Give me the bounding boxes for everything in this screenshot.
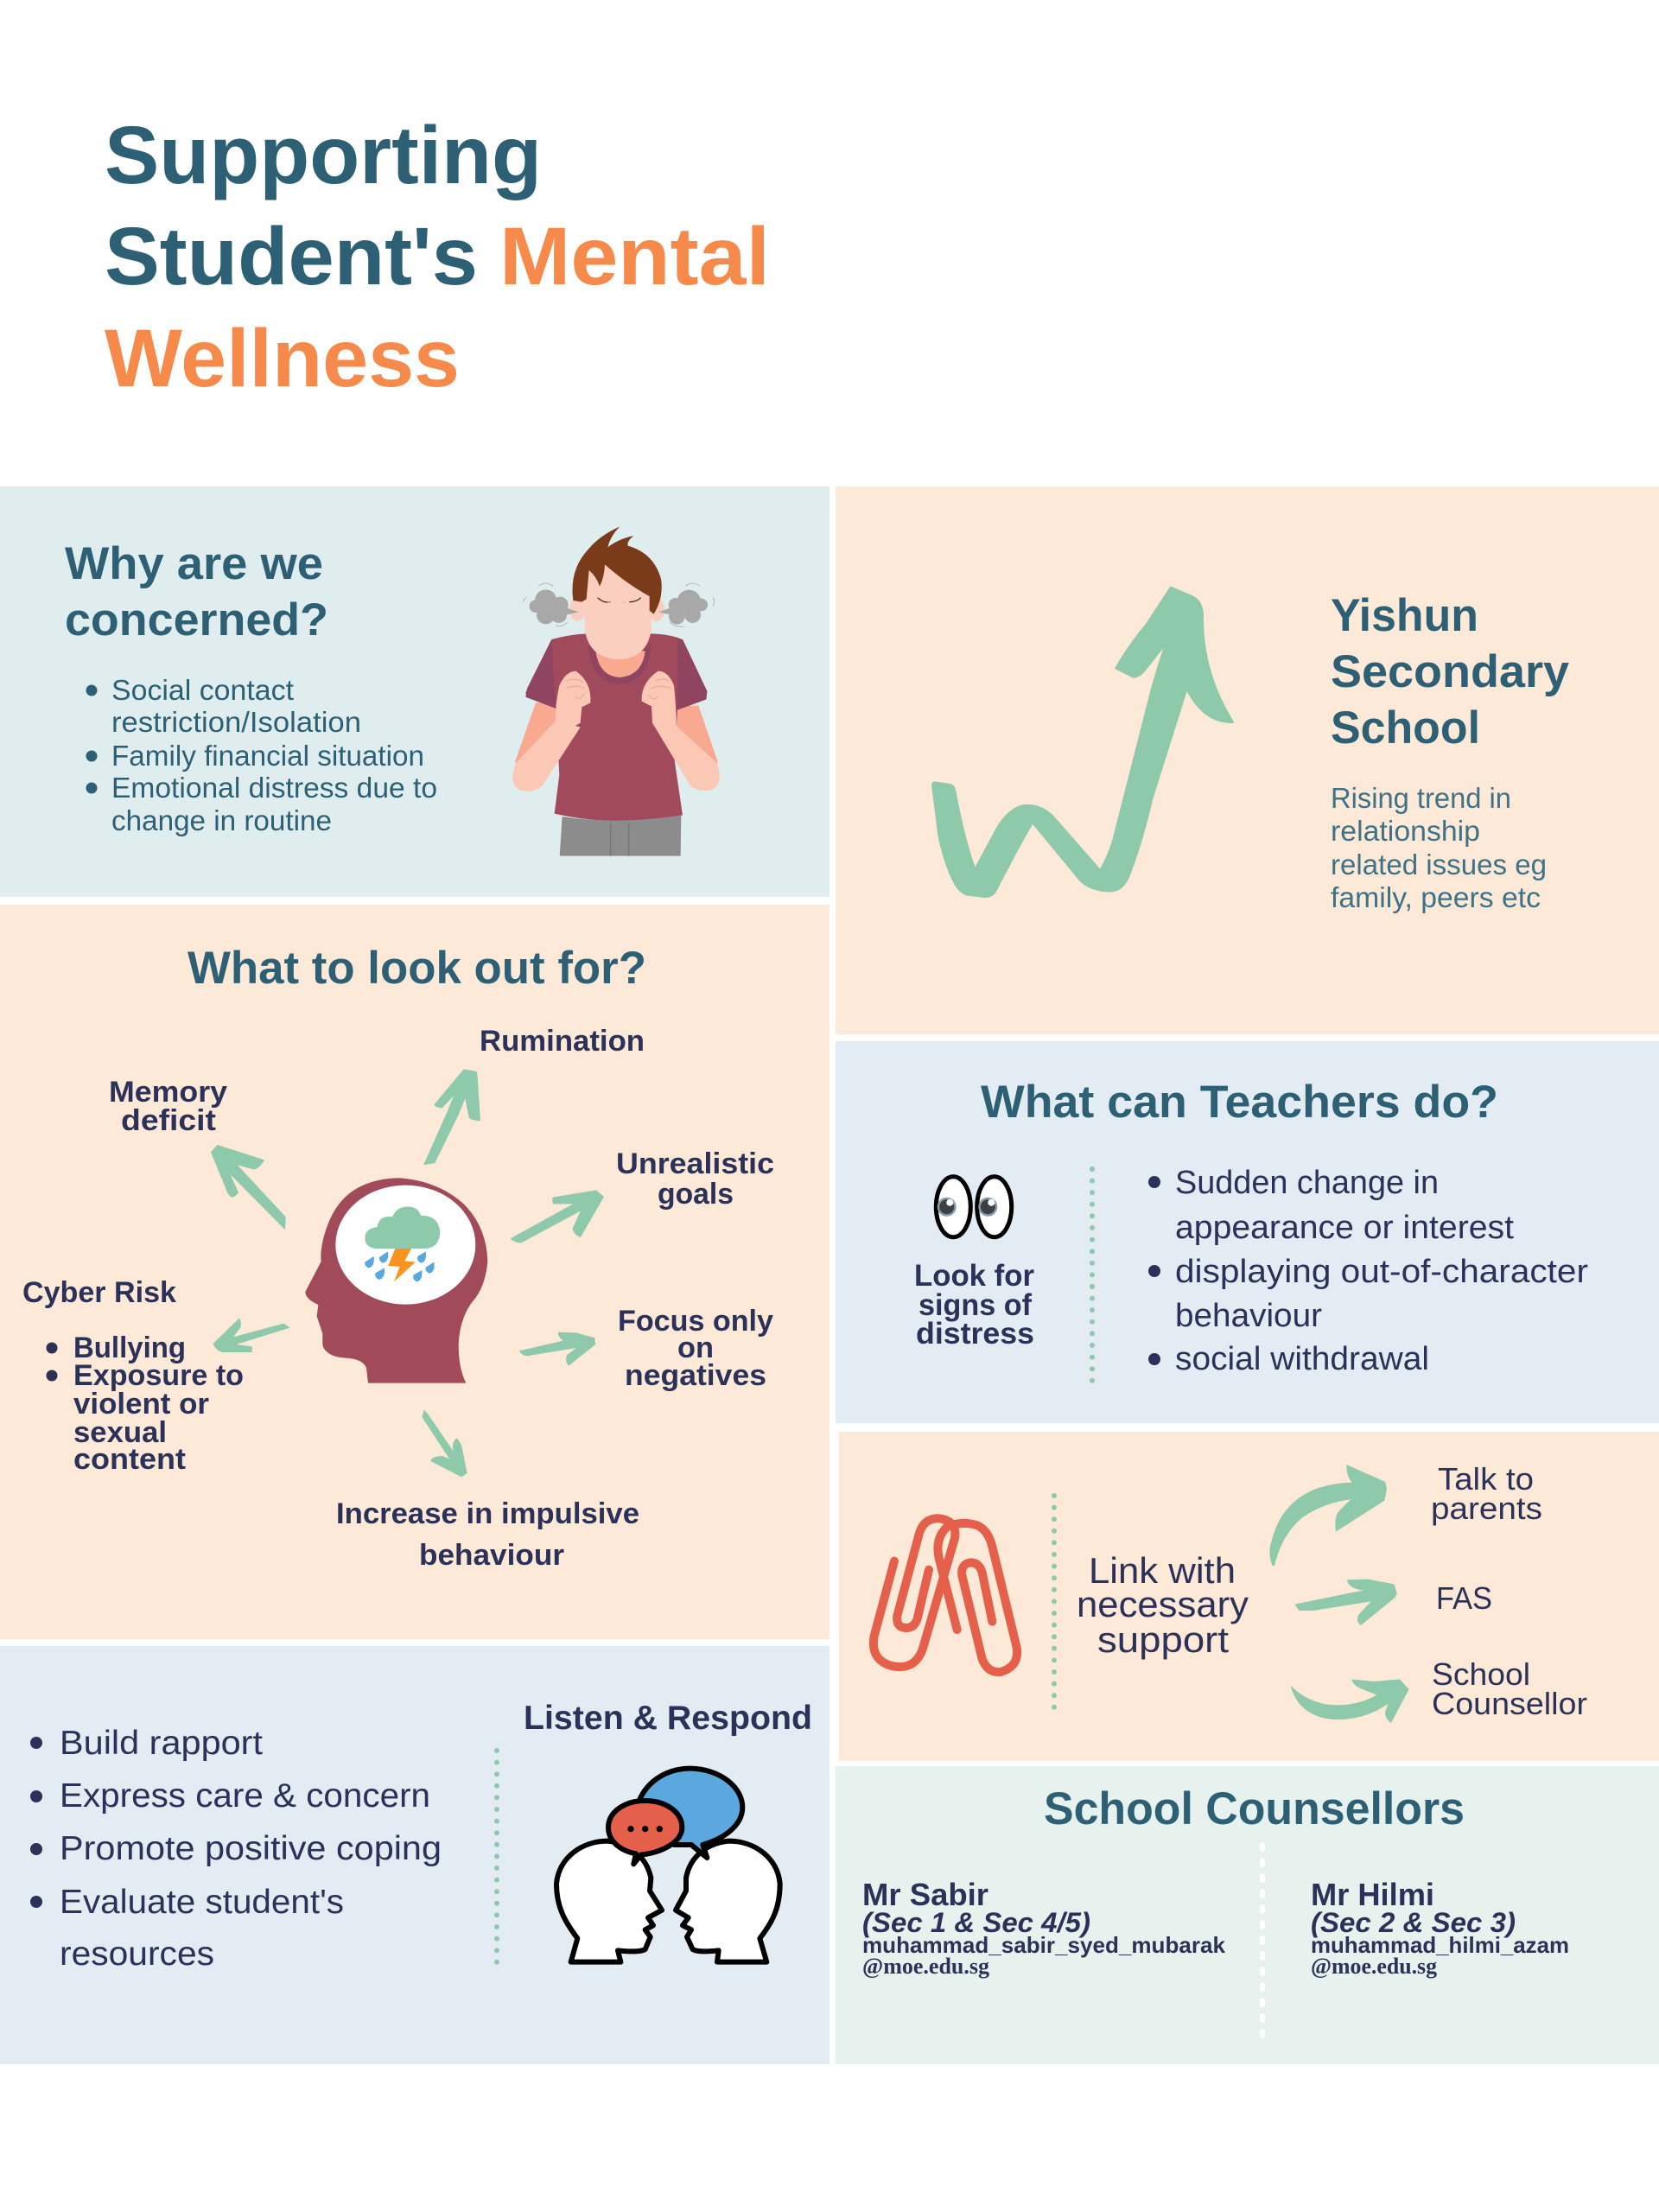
arrow: to school counsellor [1290, 1679, 1409, 1723]
bullet list: listen actions: Express care & concern [60, 1777, 430, 1815]
title: Wellness [105, 313, 460, 404]
text: link with necessary support: necessary [1077, 1584, 1249, 1624]
heading: yishun secondary school [1331, 590, 1570, 753]
bullet list: listen actions [30, 1725, 442, 1973]
panel: what can teachers do [836, 1041, 1659, 1423]
heading: yishun secondary school: Yishun [1331, 590, 1478, 641]
bullet list: concerns [86, 674, 437, 836]
heading: yishun secondary school: Secondary [1331, 646, 1570, 697]
bullet list: signs: behaviour [1175, 1298, 1322, 1334]
heading: why are we concerned: concerned? [65, 594, 328, 645]
label: school counsellor: School [1432, 1656, 1530, 1692]
heading: school counsellors: School Counsellors [1044, 1783, 1465, 1834]
bullet list: concerns: Emotional distress due to [111, 772, 437, 804]
label: rumination: Rumination [480, 1025, 645, 1058]
icon: head with storm cloud [305, 1178, 487, 1383]
bullet list: listen actions: resources [60, 1936, 214, 1973]
panel: school counsellors [836, 1766, 1659, 2064]
heading: what can teachers do: What can Teachers do? [981, 1077, 1498, 1128]
panel: what to look out for [0, 905, 830, 1639]
contact: Mr Sabir [862, 1877, 1226, 1979]
label: look for signs of distress: signs of [918, 1288, 1032, 1322]
label: increase in impulsive behaviour: Increase in impulsive [336, 1497, 639, 1530]
contact: Mr Hilmi: Mr Hilmi [1311, 1877, 1434, 1912]
icon: eyes [936, 1177, 1012, 1237]
label: focus only on negatives [618, 1305, 773, 1392]
label: cyber risk: violent or [73, 1388, 209, 1421]
label: memory deficit [109, 1076, 227, 1137]
bullet list: signs: Sudden change in [1175, 1165, 1439, 1201]
arrow: to memory deficit [211, 1145, 286, 1230]
bullet list: concerns: Social contact [111, 674, 294, 706]
icon: two heads talking [556, 1769, 780, 1962]
text: rising trend: relationship [1331, 815, 1480, 847]
bullet list: concerns: Family financial situation [111, 740, 424, 772]
bullet list: concerns: restriction/Isolation [111, 706, 361, 738]
label: FAS: FAS [1436, 1580, 1492, 1616]
title: Supporting [105, 110, 542, 201]
heading: yishun secondary school: School [1331, 702, 1480, 753]
label: cyber risk: Cyber Risk [22, 1276, 176, 1309]
label: focus only on negatives: on [677, 1332, 714, 1364]
contact: Mr Hilmi: (Sec 2 & Sec 3) [1311, 1907, 1516, 1938]
label: cyber risk: sexual [73, 1416, 167, 1449]
bullet list: listen actions: Build rapport [60, 1725, 263, 1762]
contact: Mr Hilmi: muhammad_hilmi_azam [1311, 1932, 1569, 1958]
panel: link with necessary support [839, 1432, 1659, 1761]
bullet list: signs: social withdrawal [1175, 1341, 1429, 1377]
label: unrealistic goals: goals [658, 1178, 734, 1211]
label: look for signs of distress [914, 1259, 1034, 1351]
icon: angry boy with steam [512, 526, 720, 856]
label: memory deficit: deficit [121, 1104, 216, 1137]
icon: paperclips [874, 1518, 1017, 1672]
bullet list: signs: displaying out-of-character [1175, 1254, 1588, 1290]
arrow: to rumination [423, 1069, 480, 1165]
label: school counsellor: Counsellor [1432, 1686, 1587, 1721]
label: focus only on negatives: negatives [625, 1359, 766, 1392]
text: link with necessary support [1077, 1550, 1249, 1660]
label: talk to parents: Talk to [1438, 1461, 1534, 1497]
label: increase in impulsive behaviour [336, 1497, 639, 1572]
label: talk to parents: parents [1431, 1491, 1542, 1526]
text: rising trend: Rising trend in [1331, 782, 1511, 814]
label: look for signs of distress: distress [916, 1317, 1034, 1351]
label: talk to parents [1431, 1461, 1542, 1526]
heading: why are we concerned: Why are we [65, 538, 323, 589]
contact: Mr Hilmi: @moe.edu.sg [1311, 1954, 1437, 1979]
contact: Mr Sabir: (Sec 1 & Sec 4/5) [862, 1907, 1090, 1938]
title [105, 110, 770, 404]
panel: why are we concerned [0, 486, 830, 897]
text: link with necessary support: Link with [1089, 1550, 1236, 1591]
arrow: to unrealistic goals [511, 1190, 604, 1243]
label: increase in impulsive behaviour: behaviour [419, 1539, 564, 1572]
label: cyber risk: Exposure to [73, 1359, 244, 1392]
bullet list: concerns: change in routine [111, 804, 332, 836]
text: rising trend [1331, 782, 1547, 913]
contact: Mr Sabir: @moe.edu.sg [862, 1954, 989, 1979]
label: unrealistic goals [616, 1147, 774, 1211]
heading: listen and respond: Listen & Respond [524, 1700, 812, 1737]
arrow: to focus only on negatives [519, 1332, 595, 1366]
arrow: to talk to parents [1269, 1465, 1387, 1566]
bullet list: listen actions: Evaluate student's [60, 1884, 344, 1921]
text: rising trend: related issues eg [1331, 849, 1547, 880]
title: Mental [499, 211, 770, 302]
label: unrealistic goals: Unrealistic [616, 1147, 774, 1180]
label: look for signs of distress: Look for [914, 1259, 1034, 1293]
bullet list: signs [1148, 1165, 1588, 1377]
arrow: to increase in impulsive behaviour [422, 1410, 467, 1477]
panel: listen and respond [0, 1646, 830, 2064]
icon: rising trend arrow [932, 588, 1233, 897]
title: Student's [105, 211, 478, 302]
label: focus only on negatives: Focus only [618, 1305, 773, 1338]
contact: Mr Hilmi [1311, 1877, 1569, 1979]
contact: Mr Sabir: Mr Sabir [862, 1877, 988, 1912]
heading: what to look out for: What to look out for? [188, 943, 646, 994]
panel: yishun secondary school [836, 486, 1659, 1034]
text: link with necessary support: support [1097, 1619, 1229, 1660]
heading: why are we concerned [65, 538, 328, 645]
arrow: to cyber risk [213, 1319, 290, 1352]
text: rising trend: family, peers etc [1331, 881, 1541, 913]
contact: Mr Sabir: muhammad_sabir_syed_mubarak [862, 1932, 1226, 1958]
bullet list: signs: appearance or interest [1175, 1210, 1514, 1246]
label: school counsellor [1432, 1656, 1587, 1721]
label: cyber risk [22, 1276, 244, 1476]
arrow: to FAS [1294, 1580, 1397, 1625]
label: memory deficit: Memory [109, 1076, 227, 1109]
bullet list: listen actions: Promote positive coping [60, 1830, 442, 1867]
label: cyber risk: Bullying [73, 1332, 186, 1364]
label: cyber risk: content [73, 1443, 186, 1476]
